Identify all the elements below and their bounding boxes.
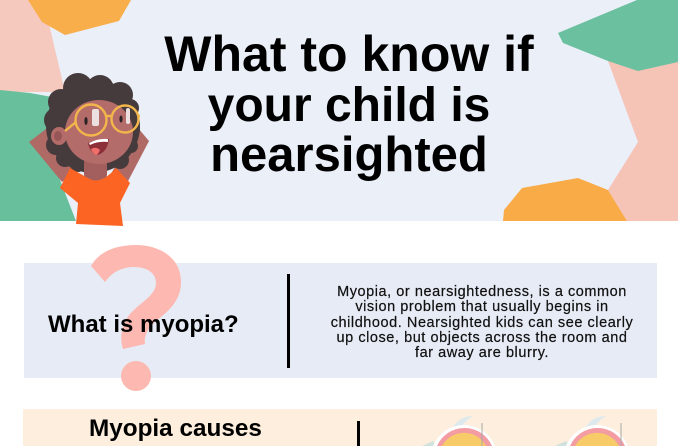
text block: myopia definition: childhood. Nearsighted kids can see clearly	[331, 315, 633, 331]
shape: bottom orange	[503, 178, 627, 221]
text block: myopia definition: Myopia, or nearsightedness, is a common	[337, 284, 627, 300]
divider	[357, 421, 360, 446]
hair	[44, 73, 140, 173]
title: your child is	[208, 79, 490, 132]
eye right	[555, 416, 628, 446]
header background with shapes	[0, 0, 678, 221]
text block: myopia definition: far away are blurry.	[415, 345, 549, 361]
shape: right pink	[608, 50, 678, 221]
shape: left green	[0, 90, 76, 221]
arms	[29, 128, 149, 183]
panel: what is myopia	[24, 263, 657, 378]
face	[65, 100, 133, 164]
divider	[287, 274, 290, 368]
title: nearsighted	[210, 128, 488, 182]
heading: what is myopia: What is myopia?	[48, 311, 239, 338]
shape: top orange	[28, 0, 131, 35]
illustration: eye diagrams	[422, 416, 628, 446]
text block: myopia definition	[331, 284, 633, 361]
neck	[84, 155, 107, 182]
shirt	[60, 168, 130, 226]
text block: myopia definition: up close, but objects across the room and	[337, 330, 627, 346]
title	[164, 26, 534, 182]
eyes	[84, 108, 130, 126]
icon: question mark	[91, 245, 181, 391]
glasses	[65, 104, 140, 136]
ear	[51, 127, 67, 145]
heading: myopia causes: Myopia causes	[89, 415, 262, 442]
title: What to know if	[164, 26, 534, 82]
shape: left pink	[0, 0, 65, 92]
text block: myopia definition: vision problem that usually begins in	[355, 299, 609, 315]
shape: right green	[558, 0, 678, 71]
eye left	[422, 416, 495, 446]
illustration: child with glasses	[29, 73, 149, 226]
mouth	[88, 139, 109, 155]
panel: myopia causes	[23, 409, 657, 446]
